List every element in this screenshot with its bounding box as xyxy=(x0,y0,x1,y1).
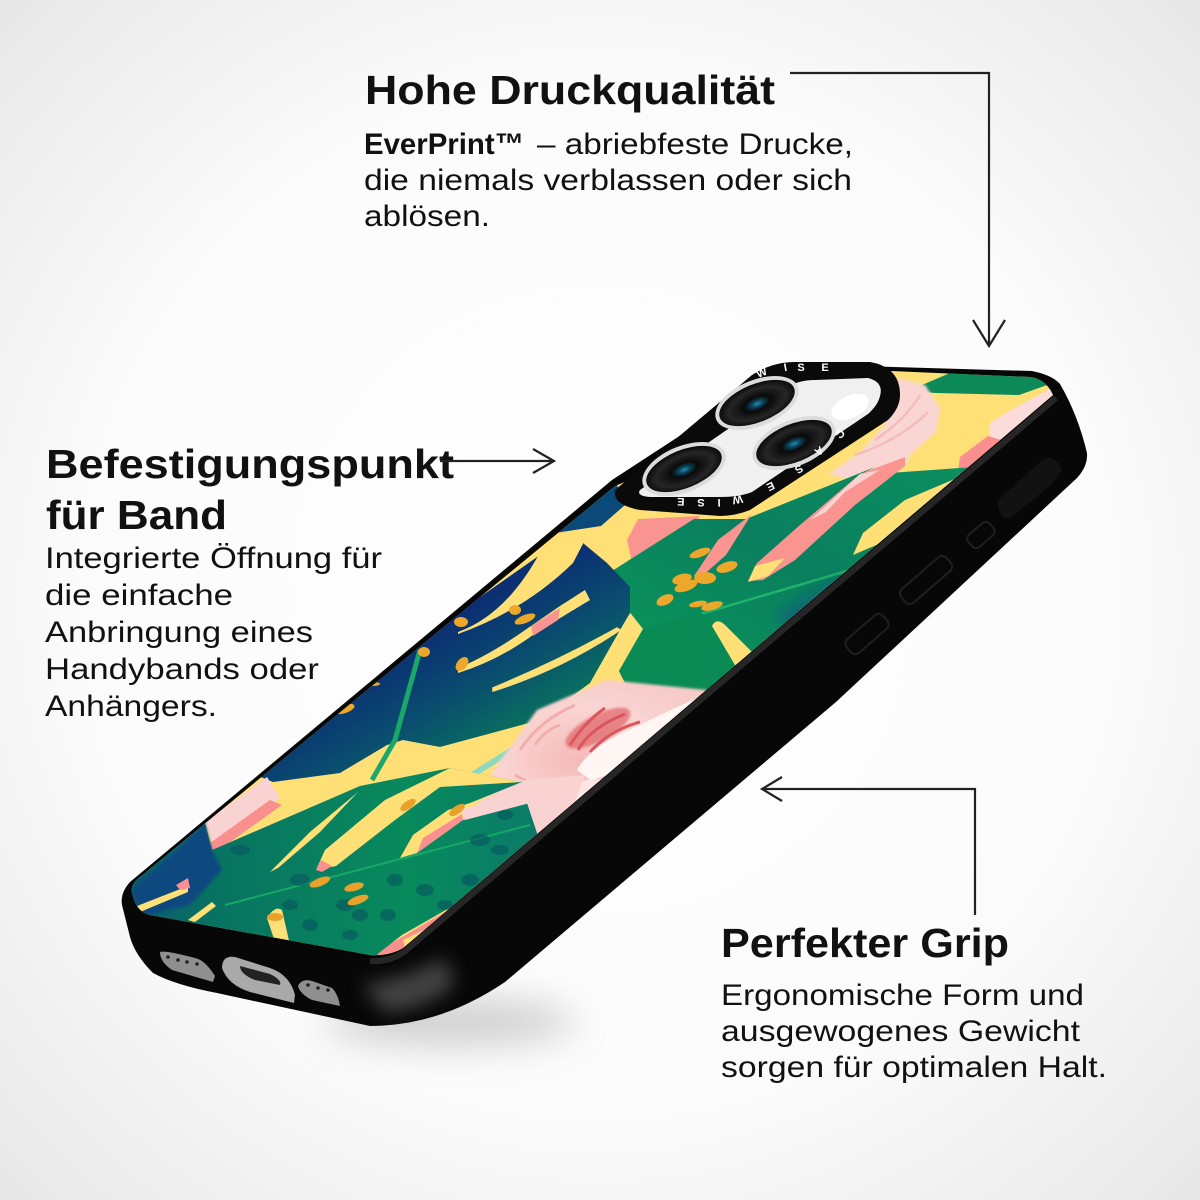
camera glass xyxy=(639,378,881,497)
phone shadow xyxy=(325,998,575,1046)
heading: Perfekter Grip xyxy=(721,920,1009,966)
arrow: print quality xyxy=(790,73,1005,346)
leaf slit: yellow xyxy=(853,478,957,555)
body text: EverPrint™ xyxy=(364,128,524,161)
brand ring text: E xyxy=(729,377,742,391)
body text: Ergonomische Form und xyxy=(721,979,1084,1012)
blue leaf slit 3 xyxy=(493,628,620,691)
body text: Handybands oder xyxy=(45,653,319,686)
leaf slit: thin coral xyxy=(694,514,752,578)
rose lower petals xyxy=(478,775,585,846)
brand ring text: S xyxy=(797,362,805,374)
gold dots near rose xyxy=(652,692,716,754)
brand ring text: S xyxy=(706,390,719,404)
heading: Befestigungspunkt xyxy=(46,441,454,487)
body text: die einfache xyxy=(45,579,233,612)
right edge leaf xyxy=(970,398,1054,478)
brand ring text: E xyxy=(764,479,776,493)
brand ring text: A xyxy=(812,443,825,458)
teal wash xyxy=(776,572,844,626)
camera ring xyxy=(615,362,900,516)
brand ring text xyxy=(663,362,847,508)
lower leaf slit C xyxy=(400,803,484,858)
blue leaf midrib xyxy=(372,650,420,780)
lens top xyxy=(708,365,806,441)
lower leaf slit xyxy=(712,621,752,666)
case side edge xyxy=(370,398,1056,961)
blue corner xyxy=(130,823,222,915)
bottom strips xyxy=(137,886,188,912)
body text: ablösen. xyxy=(364,200,490,233)
brand ring text: I xyxy=(783,362,788,374)
case body xyxy=(122,364,1087,1026)
lower leaf midrib xyxy=(225,825,530,905)
brand ring text: E xyxy=(677,495,685,507)
large rose xyxy=(455,680,707,840)
floral artwork xyxy=(132,371,1053,956)
coral patch centre xyxy=(627,516,700,562)
bottom corner bumper highlight xyxy=(362,958,455,1012)
brand ring text: W xyxy=(755,365,770,381)
small green leaf right of rose xyxy=(698,695,700,698)
coral band bottom xyxy=(371,910,447,956)
body text: Anhängers. xyxy=(45,690,217,723)
leaf spots xyxy=(230,810,513,940)
brand ring text: I xyxy=(717,496,721,508)
brand ring text: S xyxy=(697,496,705,508)
body text: sorgen für optimalen Halt. xyxy=(721,1051,1107,1084)
side switch xyxy=(998,458,1062,518)
body text xyxy=(721,979,1107,1084)
phone with floral case xyxy=(100,350,1100,1026)
brand ring text: E xyxy=(821,362,829,374)
darker lower leaf lobe xyxy=(619,612,749,695)
brand ring text: C xyxy=(663,426,677,440)
leaf midrib xyxy=(701,569,848,614)
coral patch right xyxy=(958,436,1000,476)
coral left xyxy=(210,800,282,855)
brand ring text: S xyxy=(792,462,805,476)
callout: Hohe Druckqualität xyxy=(364,67,853,233)
charging port and speakers xyxy=(160,952,340,1006)
body text xyxy=(45,542,382,723)
brand ring text: A xyxy=(684,409,698,423)
lens left xyxy=(635,431,733,507)
flash xyxy=(827,389,873,425)
upper green leaf xyxy=(612,457,974,698)
callout: Befestigungspunkt xyxy=(45,441,454,723)
corner rose xyxy=(989,389,1053,443)
heading: Hohe Druckqualität xyxy=(365,67,775,113)
gold dots lower leaf xyxy=(267,797,467,921)
body text: die niemals verblassen oder sich xyxy=(364,164,852,197)
gold dots blue leaf xyxy=(334,605,537,716)
leaf slit: coral and yellow xyxy=(748,457,905,581)
gold dots upper xyxy=(655,545,739,613)
body text xyxy=(364,128,853,233)
navy lobe under camera xyxy=(558,485,625,532)
body text: ausgewogenes Gewicht xyxy=(721,1015,1081,1048)
side buttons xyxy=(843,520,997,657)
lower leaf slit B xyxy=(316,768,522,870)
yellow bottom band xyxy=(403,898,490,948)
body text: Anbringung eines xyxy=(45,616,313,649)
body text: Integrierte Öffnung für xyxy=(45,542,382,575)
brand ring text: C xyxy=(833,426,847,440)
blue leaf slit 1 xyxy=(458,538,586,634)
top-right leaf xyxy=(920,374,1046,395)
brand ring text: W xyxy=(731,492,744,506)
body text: – abriebfeste Drucke, xyxy=(537,128,853,161)
heading: für Band xyxy=(46,492,227,538)
arrow: grip xyxy=(762,777,975,915)
camera module xyxy=(615,362,900,516)
lower leaf slit A xyxy=(270,792,358,872)
callout: Perfekter Grip xyxy=(721,920,1107,1084)
arrow: strap attachment xyxy=(440,449,554,473)
lens right xyxy=(745,405,843,481)
heading xyxy=(46,441,454,538)
stem xyxy=(471,746,513,774)
blue leaf xyxy=(258,538,630,782)
top rose xyxy=(829,378,940,480)
lower big leaf xyxy=(100,768,540,960)
small rose left xyxy=(205,777,280,842)
blue leaf slit 2 xyxy=(458,590,590,673)
